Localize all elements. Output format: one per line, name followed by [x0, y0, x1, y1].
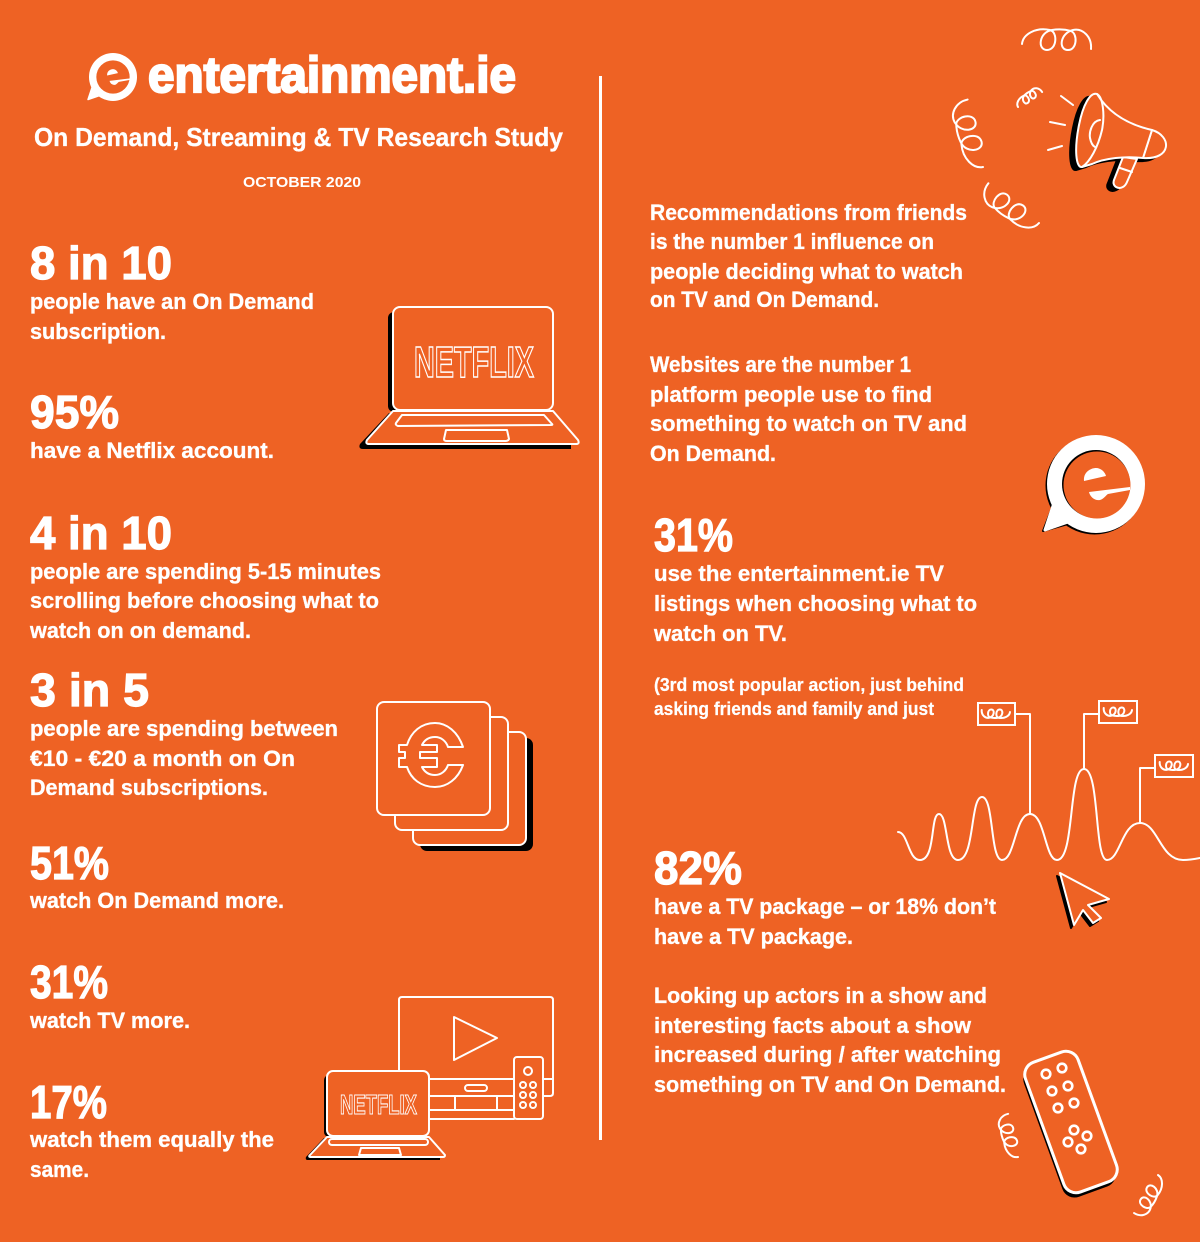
stat: 3 in 5: Demand subscriptions. — [30, 775, 268, 800]
stat: 17%: watch them equally the — [29, 1127, 274, 1152]
stat: 95%: 95% — [30, 386, 119, 438]
stat: 4 in 10: people are spending 5-15 minutes — [30, 559, 381, 584]
icon: laptop with Netflix — [359, 307, 579, 449]
stat: 31% TV listings: 31% — [654, 509, 733, 561]
stat: 3 in 5: €10 - €20 a month on On — [30, 746, 295, 771]
text: websites: platform people use to find — [650, 382, 932, 407]
stat: 82%: have a TV package – or 18% don’t — [654, 894, 996, 919]
stat: 31% TV listings: use the entertainment.ie TV — [654, 561, 944, 586]
icon: remote control — [1020, 1048, 1121, 1201]
stat: 31% watch TV: 31% — [30, 956, 108, 1008]
tag 1 — [978, 703, 1015, 725]
icon: logo speech bubble — [88, 53, 137, 101]
stat: 8 in 10: people have an On Demand — [30, 289, 314, 314]
stat: 31% watch TV: watch TV more. — [29, 1008, 190, 1033]
stat: 31% TV listings: listings when choosing what to — [654, 591, 977, 616]
stat: 51%: watch On Demand more. — [29, 888, 284, 913]
remote — [514, 1057, 543, 1119]
note: 3rd most popular action: (3rd most popular action, just behind — [654, 674, 964, 695]
text: looking up actors: Looking up actors in a show and — [654, 983, 987, 1008]
centre divider — [599, 76, 602, 1140]
icon: decorative squiggles top right — [949, 29, 1091, 234]
text: recommendations from friends — [650, 200, 967, 312]
stat: 4 in 10: watch on on demand. — [29, 618, 251, 643]
icon: decorative squiggles near remote — [996, 1114, 1166, 1219]
wordmark: entertainment.ie — [148, 47, 516, 103]
text: looking up actors: increased during / after watching — [654, 1042, 1001, 1067]
stat: 3 in 5: people are spending between — [30, 716, 338, 741]
text: websites: something to watch on TV and — [650, 411, 967, 436]
text: recommendations from friends: people deciding what to watch — [650, 259, 963, 284]
stat: 95%: have a Netflix account. — [30, 438, 274, 463]
text: looking up actors — [654, 983, 1006, 1097]
stat: 82%: have a TV package. — [654, 924, 853, 949]
icon: mouse cursor — [1057, 873, 1109, 928]
small laptop — [306, 1071, 445, 1160]
stat: 17%: 17% — [30, 1076, 107, 1128]
stat: 4 in 10: scrolling before choosing what to — [30, 588, 379, 613]
icon: euro cards — [377, 702, 533, 851]
icon: entertainment.ie speech bubble — [1043, 435, 1145, 534]
stat: 3 in 5: 3 in 5 — [30, 664, 149, 716]
icon: megaphone — [1048, 94, 1166, 191]
stat: 8 in 10 — [30, 237, 314, 344]
text: looking up actors: interesting facts about a show — [654, 1013, 971, 1038]
note: 3rd most popular action: asking friends and family and just — [654, 698, 934, 719]
text: websites: On Demand. — [650, 441, 776, 466]
icon: laptop with Netflix: NETFLIX — [414, 338, 534, 387]
text: looking up actors: something on TV and On Demand. — [654, 1072, 1006, 1097]
tag 2 — [1099, 701, 1137, 723]
icon: TV, laptop and remote — [306, 997, 553, 1160]
stat: 31% TV listings — [653, 509, 977, 646]
stat: 3 in 5 — [30, 664, 338, 800]
tag 3 — [1155, 755, 1193, 777]
stat: 51%: 51% — [30, 837, 109, 889]
stat: 31% TV listings: watch on TV. — [653, 621, 787, 646]
chart: wave line with tags — [898, 701, 1200, 860]
stat: 31% watch TV — [29, 956, 190, 1033]
text: websites: Websites are the number 1 — [650, 352, 911, 377]
stat: 4 in 10 — [29, 507, 381, 643]
stat: 95% — [30, 386, 274, 463]
text: websites — [650, 352, 967, 466]
heading: date: OCTOBER 2020 — [243, 174, 361, 191]
stat: 8 in 10: subscription. — [30, 319, 166, 344]
text: recommendations from friends: Recommendations from friends — [650, 200, 967, 225]
stat: 51% — [29, 837, 284, 913]
note: 3rd most popular action — [654, 674, 964, 719]
logo: entertainment.ie — [88, 47, 516, 103]
stat: 17% — [29, 1076, 274, 1182]
stat: 17%: same. — [30, 1157, 89, 1182]
stat: 8 in 10: 8 in 10 — [30, 237, 172, 289]
small laptop: NETFLIX — [340, 1089, 417, 1120]
text: recommendations from friends: on TV and On Demand. — [650, 287, 879, 312]
heading: study title: On Demand, Streaming & TV Research Study — [34, 122, 564, 152]
text: recommendations from friends: is the number 1 influence on — [650, 229, 934, 254]
stat: 82% — [654, 842, 996, 949]
stat: 4 in 10: 4 in 10 — [30, 507, 172, 559]
stat: 82%: 82% — [654, 842, 742, 894]
